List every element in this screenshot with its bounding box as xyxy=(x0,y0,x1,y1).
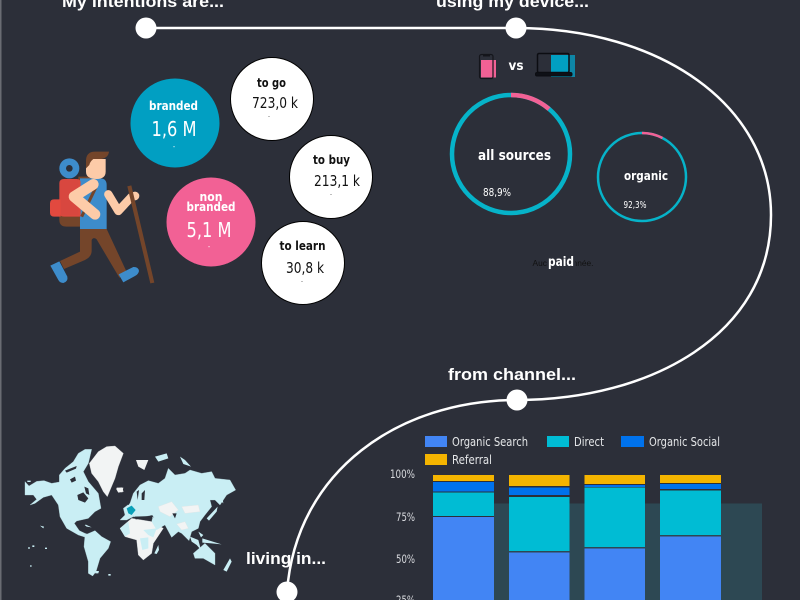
chart: y axis labels: 100% xyxy=(390,467,415,481)
donut: all sources xyxy=(452,95,570,213)
map: americas xyxy=(25,446,124,576)
bar 3 xyxy=(584,475,645,600)
donut: all sources: all sources xyxy=(478,148,551,164)
chart: y axis labels xyxy=(390,467,415,600)
map: eurasia africa oceania xyxy=(117,453,236,572)
bubble: non branded xyxy=(166,178,256,266)
chart: background band xyxy=(494,504,762,600)
chart: stacked bars xyxy=(433,475,721,600)
chart legend: Referral xyxy=(452,453,492,467)
bar 1 xyxy=(433,475,494,600)
bubble: to go xyxy=(230,58,314,140)
bubble: non branded: - xyxy=(208,244,211,251)
node: intentions xyxy=(136,18,156,38)
donut: organic: 92,3% xyxy=(624,200,646,211)
bubble: to buy: - xyxy=(330,192,332,198)
chart: y axis labels: 50% xyxy=(396,552,415,566)
text: paid: paid xyxy=(548,255,574,270)
bubble: to go: to go xyxy=(257,75,286,90)
bubble: to buy: to buy xyxy=(313,152,350,167)
bubble: to go: - xyxy=(268,114,270,120)
bubble: to learn: - xyxy=(301,279,303,285)
node: channel xyxy=(506,390,528,410)
path: journey line xyxy=(146,28,771,592)
bubble: to buy xyxy=(290,136,372,218)
donut: all sources: 88,9% xyxy=(483,186,511,199)
chart legend: Organic Social xyxy=(649,435,720,449)
bubble: to go: 723,0 k xyxy=(252,94,298,112)
bubble: branded: 1,6 M xyxy=(152,117,196,141)
bubble: to learn xyxy=(262,222,344,304)
bubble: non branded: branded xyxy=(186,199,236,214)
chart legend: Direct xyxy=(574,435,604,449)
icon: laptop xyxy=(536,54,575,77)
map: world xyxy=(25,446,236,576)
text: no data note: Aucune donnée. xyxy=(532,258,594,268)
bar 4 xyxy=(660,475,721,600)
donut: organic xyxy=(598,133,686,221)
bubble: non branded: non xyxy=(200,189,222,204)
icon: hiker xyxy=(50,152,154,283)
icon: phone xyxy=(480,54,496,78)
bubble: to buy: 213,1 k xyxy=(314,172,360,190)
bubble: non branded: 5,1 M xyxy=(186,218,232,242)
bubble: branded: branded xyxy=(149,98,198,113)
bubble: branded xyxy=(130,78,220,168)
bubble: to learn: 30,8 k xyxy=(286,259,324,277)
chart legend xyxy=(425,435,720,467)
bar 2 xyxy=(509,475,570,600)
bubble: branded: - xyxy=(173,144,176,151)
chart legend: Organic Search xyxy=(452,435,528,449)
heading: living in: living in... xyxy=(246,549,326,568)
text: vs: vs xyxy=(508,58,524,74)
heading: channel: from channel... xyxy=(448,365,576,384)
node: living xyxy=(276,582,298,600)
donut: organic: organic xyxy=(624,168,668,183)
chart: y axis labels: 75% xyxy=(396,510,415,524)
node: device xyxy=(506,18,526,38)
bubble: to learn: to learn xyxy=(280,238,326,253)
